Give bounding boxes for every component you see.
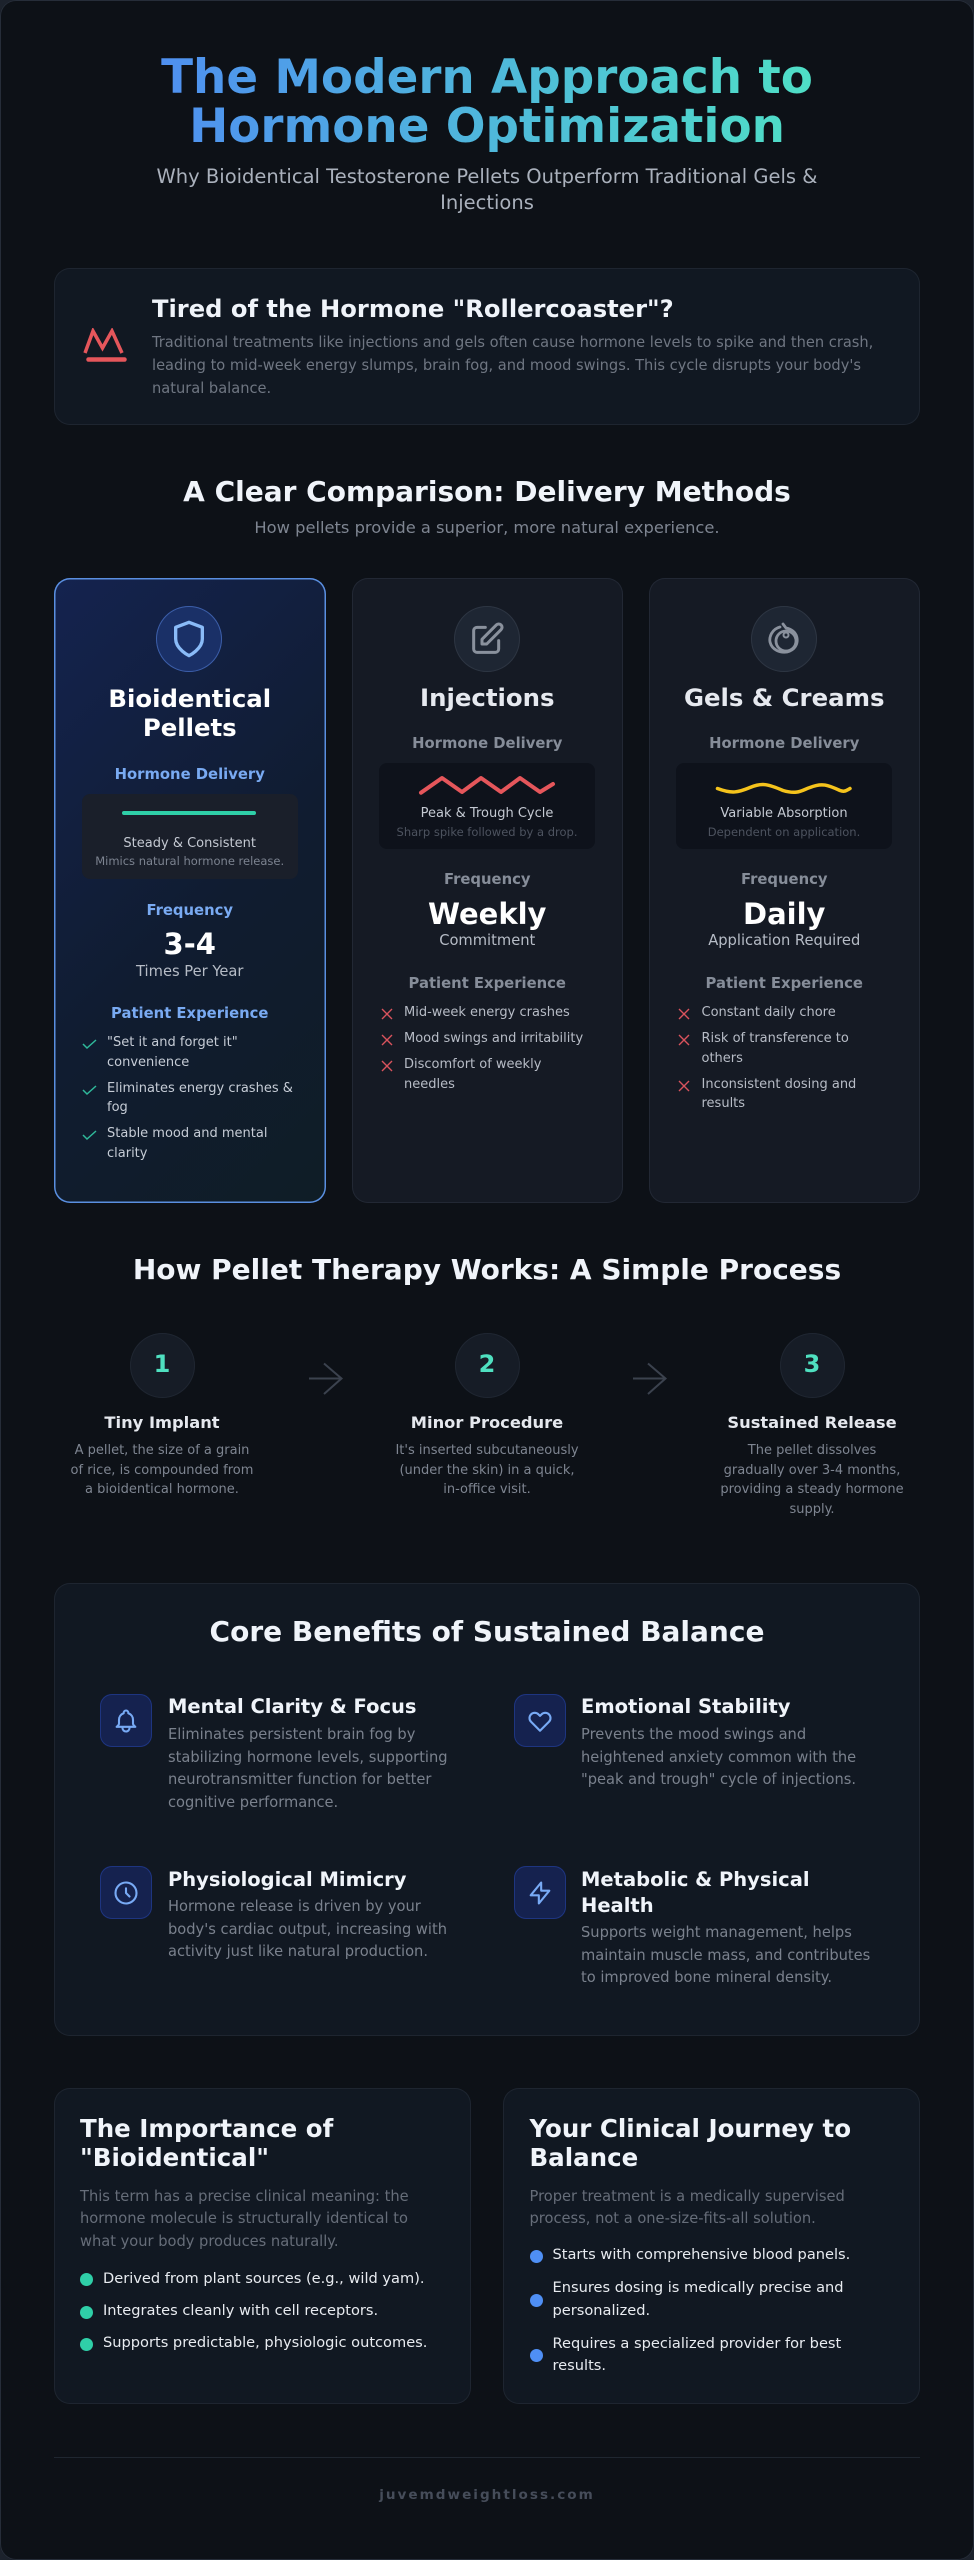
benefit: metabolic health — [514, 1866, 894, 1996]
check — [82, 1040, 96, 1049]
item — [552, 2277, 844, 2322]
cross list — [678, 1005, 856, 1111]
panel: gels and creams — [648, 578, 920, 1203]
panel: core benefits — [54, 1583, 920, 2036]
label: hormone delivery: Hormone Delivery — [412, 734, 562, 752]
section subtitle: How pellets provide a superior, more natural experience. — [254, 518, 720, 537]
benefit title: Emotional Stability — [581, 1695, 791, 1718]
label: hormone delivery: Hormone Delivery — [115, 766, 265, 783]
bullet — [530, 2348, 542, 2362]
subtitle: Injections — [440, 191, 534, 214]
icon: hormone rollercoaster — [83, 328, 127, 362]
subtitle: Why Bioidentical Testosterone Pellets Outperform Traditional Gels & — [157, 165, 817, 188]
section title: A Clear Comparison: Delivery Methods — [183, 475, 791, 508]
cross — [382, 1034, 392, 1046]
problem text: natural balance. — [152, 380, 271, 397]
benefit text: Eliminates persistent brain fog by — [168, 1726, 415, 1743]
step text: in-office visit. — [443, 1482, 531, 1497]
item — [107, 1035, 238, 1070]
panel text — [80, 2186, 409, 2254]
step text: a bioidentical hormone. — [85, 1482, 239, 1497]
benefits heading: Core Benefits of Sustained Balance — [210, 1615, 764, 1648]
item — [404, 1057, 541, 1092]
item: convenience — [107, 1054, 189, 1070]
label: patient experience: Patient Experience — [706, 974, 863, 992]
icon: bolt — [514, 1866, 566, 1919]
panel: bioidentical pellets — [54, 578, 326, 1203]
item: needles — [404, 1076, 455, 1092]
zigzag line — [418, 776, 556, 795]
frequency value: 3-4 — [164, 926, 216, 960]
chart note: Sharp spike followed by a drop. — [397, 824, 577, 838]
step 2 — [395, 1333, 579, 1497]
benefit text: activity just like natural production. — [168, 1943, 428, 1960]
panel text: what your body produces naturally. — [80, 2233, 339, 2250]
panel heading: "Bioidentical" — [80, 2142, 269, 2172]
cross list — [382, 1005, 583, 1092]
panel heading — [80, 2114, 333, 2172]
footer — [54, 2457, 920, 2518]
icon: pencil — [454, 606, 520, 672]
step 1 — [71, 1333, 253, 1497]
label: hormone delivery: Hormone Delivery — [709, 734, 859, 752]
item — [702, 1031, 849, 1066]
item: "Set it and forget it" — [107, 1035, 238, 1050]
item: Risk of transference to — [702, 1031, 849, 1046]
check — [82, 1086, 96, 1095]
chart: variable absorption — [676, 763, 892, 849]
benefit text: "peak and trough" cycle of injections. — [581, 1771, 856, 1788]
panel text: Proper treatment is a medically supervised — [530, 2188, 845, 2204]
step text — [720, 1443, 904, 1516]
card title: Gels & Creams — [684, 683, 885, 712]
card title — [108, 684, 271, 742]
header — [157, 51, 817, 214]
benefit text: body's cardiac output, increasing with — [168, 1921, 447, 1938]
title — [161, 51, 813, 154]
panel heading — [530, 2114, 851, 2172]
bullet — [80, 2273, 93, 2286]
card title: Pellets — [143, 713, 237, 742]
check — [82, 1130, 96, 1140]
item: Starts with comprehensive blood panels. — [552, 2246, 850, 2263]
panel heading: Your Clinical Journey to — [530, 2114, 851, 2142]
panel: rollercoaster problem — [54, 268, 920, 425]
problem text: Traditional treatments like injections and gels often cause hormone levels to spike and then crash, — [152, 334, 873, 351]
step number: 2 — [479, 1350, 495, 1378]
item: Eliminates energy crashes & — [107, 1081, 293, 1096]
benefit title — [581, 1866, 810, 1918]
chart note: Dependent on application. — [708, 824, 860, 838]
benefit text: cognitive performance. — [168, 1794, 338, 1811]
benefit title: Metabolic & Physical — [581, 1868, 810, 1890]
benefit text — [581, 1726, 856, 1788]
bullet — [80, 2306, 93, 2318]
panel: clinical journey — [503, 2088, 920, 2404]
step text: providing a steady hormone — [720, 1482, 904, 1497]
bullet — [530, 2250, 542, 2262]
cross — [678, 1034, 690, 1046]
label: frequency: Frequency — [444, 871, 531, 888]
benefit text — [168, 1726, 448, 1811]
title: Hormone Optimization — [189, 100, 785, 154]
item — [107, 1126, 267, 1161]
step number: 1 — [154, 1350, 170, 1378]
item: personalized. — [552, 2302, 650, 2319]
chart caption: Steady & Consistent — [123, 836, 256, 850]
item — [107, 1081, 293, 1115]
step number — [454, 1332, 520, 1398]
step text: A pellet, the size of a grain — [75, 1443, 249, 1458]
item: Supports predictable, physiologic outcomes. — [103, 2334, 427, 2351]
item: clarity — [107, 1146, 147, 1161]
item: Constant daily chore — [702, 1005, 836, 1020]
cross — [382, 1060, 392, 1072]
item: results — [702, 1096, 745, 1111]
benefit text: Supports weight management, helps — [581, 1924, 852, 1941]
chart: steady line — [82, 794, 298, 879]
item: Integrates cleanly with cell receptors. — [103, 2302, 378, 2319]
benefit: physiological mimicry — [100, 1866, 447, 1960]
title: The Modern Approach to — [161, 51, 813, 105]
label: patient experience: Patient Experience — [111, 1005, 268, 1022]
frequency value: Weekly — [428, 897, 546, 931]
panel text: This term has a precise clinical meaning: the — [80, 2188, 409, 2204]
bullet list — [80, 2268, 460, 2358]
icon: shield — [156, 606, 222, 672]
item: Mid-week energy crashes — [404, 1005, 570, 1020]
benefit text: Hormone release is driven by your — [168, 1898, 421, 1915]
frequency value: Daily — [743, 897, 825, 931]
icon: bell — [100, 1694, 152, 1747]
benefit title: Mental Clarity & Focus — [168, 1695, 417, 1718]
icon: heart — [514, 1694, 566, 1747]
chart caption: Peak & Trough Cycle — [421, 806, 553, 820]
item: Stable mood and mental — [107, 1126, 267, 1141]
panel text — [530, 2186, 845, 2231]
card title: Injections — [420, 683, 554, 712]
benefit text: to improved bone mineral density. — [581, 1969, 832, 1986]
item: Discomfort of weekly — [404, 1057, 541, 1072]
step title: Sustained Release — [727, 1412, 897, 1432]
step number: 3 — [804, 1350, 820, 1378]
panel text: process, not a one-size-fits-all solution. — [530, 2210, 816, 2227]
cross — [678, 1080, 690, 1092]
step 3 — [720, 1333, 904, 1516]
chart note: Mimics natural hormone release. — [95, 854, 284, 868]
step title: Minor Procedure — [411, 1412, 563, 1432]
problem heading: Tired of the Hormone "Rollercoaster"? — [152, 295, 674, 323]
subtitle — [157, 165, 817, 214]
step text: supply. — [789, 1502, 835, 1516]
heading: process: How Pellet Therapy Works: A Simple Process — [133, 1253, 841, 1286]
panel: importance of bioidentical — [54, 2088, 471, 2404]
benefit text: heightened anxiety common with the — [581, 1749, 856, 1766]
panel heading: Balance — [530, 2142, 638, 2172]
wave line — [716, 782, 852, 794]
panel text: hormone molecule is structurally identical to — [80, 2210, 408, 2227]
item: Inconsistent dosing and — [702, 1077, 856, 1092]
bullet list — [530, 2244, 910, 2379]
bullet — [530, 2294, 542, 2306]
item: Requires a specialized provider for best — [552, 2334, 841, 2352]
frequency unit: Times Per Year — [136, 963, 243, 980]
arrow — [633, 1362, 667, 1395]
check list — [82, 1035, 293, 1161]
benefit text — [581, 1922, 870, 1990]
panel: injections — [352, 578, 623, 1203]
item: Mood swings and irritability — [404, 1031, 583, 1046]
benefit: emotional stability — [514, 1694, 856, 1788]
step number — [780, 1332, 844, 1398]
step text — [395, 1443, 579, 1497]
benefit text: Prevents the mood swings and — [581, 1726, 806, 1743]
icon: clock — [100, 1866, 152, 1919]
step text: It's inserted subcutaneously — [395, 1443, 579, 1458]
benefit text: stabilizing hormone levels, supporting — [168, 1749, 448, 1766]
problem text — [152, 334, 873, 397]
item: Ensures dosing is medically precise and — [552, 2279, 844, 2296]
step text: gradually over 3-4 months, — [724, 1462, 900, 1478]
step text: The pellet dissolves — [748, 1443, 876, 1458]
footer url: juvemdweightloss.com — [379, 2487, 595, 2503]
item: fog — [107, 1100, 128, 1115]
label: patient experience: Patient Experience — [409, 974, 566, 992]
label: frequency: Frequency — [146, 902, 233, 919]
step text: (under the skin) in a quick, — [399, 1462, 575, 1478]
cross — [678, 1008, 690, 1020]
card title: Bioidentical — [108, 684, 271, 713]
step number — [130, 1332, 194, 1398]
benefit text — [168, 1896, 447, 1964]
frequency unit: Application Required — [708, 932, 860, 949]
bullet — [80, 2338, 93, 2351]
problem text: leading to mid-week energy slumps, brain fog, and mood swings. This cycle disrupts your body's — [152, 357, 861, 374]
benefit text: neurotransmitter function for better — [168, 1771, 431, 1788]
steady line — [122, 811, 256, 815]
item — [552, 2332, 841, 2378]
item: Derived from plant sources (e.g., wild yam). — [103, 2270, 425, 2286]
chart: peak and trough — [379, 763, 595, 849]
label: frequency: Frequency — [741, 871, 828, 888]
panel heading: The Importance of — [80, 2114, 333, 2142]
icon: swirl — [751, 606, 817, 672]
benefit title: Health — [581, 1894, 654, 1916]
frequency unit: Commitment — [439, 932, 535, 949]
step text — [71, 1443, 253, 1497]
benefit text: maintain muscle mass, and contributes — [581, 1947, 870, 1964]
item: others — [702, 1050, 743, 1066]
benefit title: Physiological Mimicry — [168, 1868, 406, 1890]
step text: of rice, is compounded from — [71, 1462, 253, 1478]
step title: Tiny Implant — [104, 1412, 220, 1432]
cross — [382, 1008, 392, 1020]
heading: comparison — [183, 475, 791, 537]
chart caption: Variable Absorption — [720, 806, 848, 820]
item: results. — [552, 2357, 606, 2374]
item — [702, 1077, 856, 1111]
arrow — [309, 1362, 343, 1395]
benefit: mental clarity — [100, 1694, 448, 1811]
